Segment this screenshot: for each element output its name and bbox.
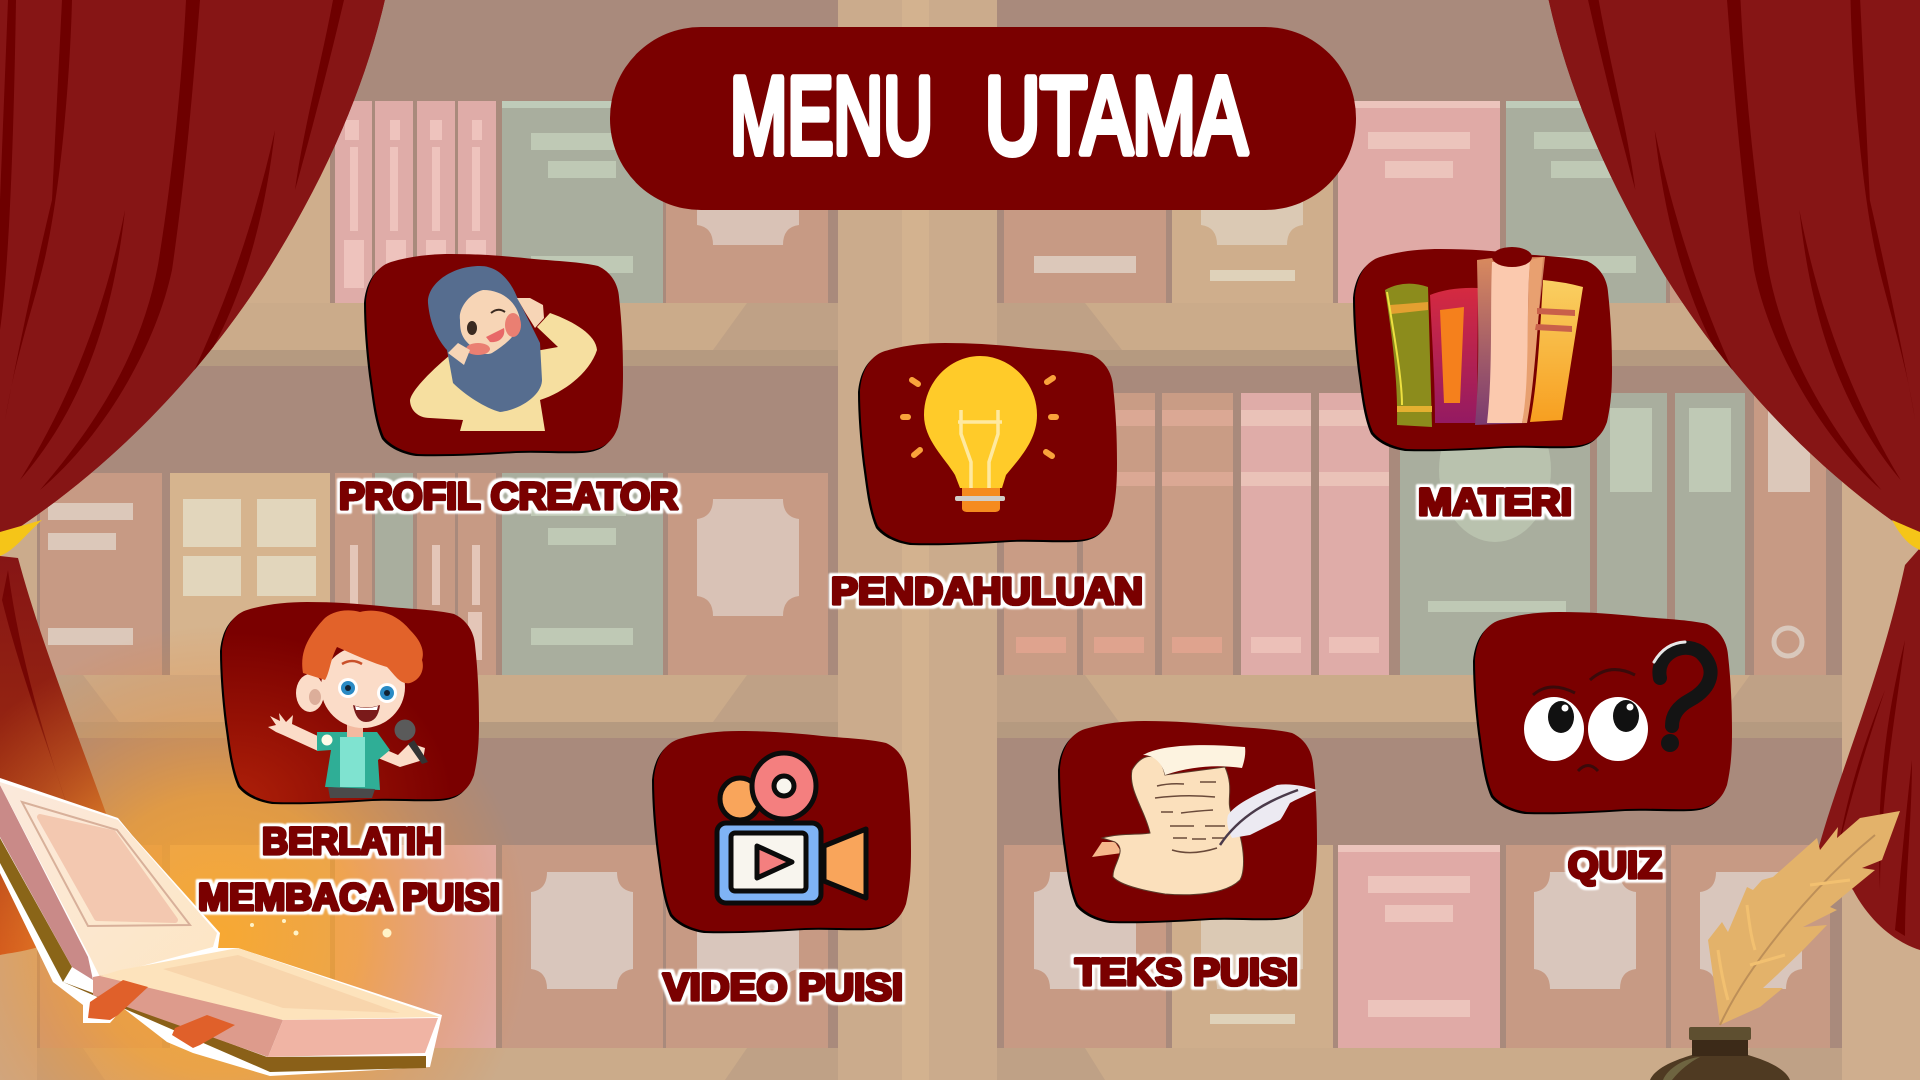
card: teks puisi [1058,721,1317,923]
lower right curtain [1818,548,1920,950]
title banner [610,27,1356,210]
ink bottle [1650,1027,1790,1080]
title banner: UTAMA [985,55,1247,177]
shelf boards [37,303,1842,1080]
open book [0,778,442,1076]
title banner: MENU [730,55,933,177]
label: video puisi: VIDEO PUISI [663,967,903,1009]
right curtain [1548,0,1920,540]
label: pendahuluan: PENDAHULUAN [831,571,1143,613]
card: berlatih membaca puisi [220,602,479,804]
glow behind open book [0,620,560,1080]
card: materi [1353,247,1612,451]
label: berlatih membaca puisi: MEMBACA PUISI [198,877,500,919]
card: quiz [1473,612,1732,814]
icon: stack of books [1385,247,1583,427]
card: pendahuluan [858,343,1117,545]
books row 3 [40,845,1830,1048]
label: materi: MATERI [1418,482,1572,524]
sparkles [250,919,392,938]
label: profil creator: PROFIL CREATOR [339,476,678,518]
icon: girl in hijab [410,266,597,431]
quill feather [1708,811,1900,1025]
icon: singing boy [268,610,428,798]
books row 1 [190,101,1740,303]
curtain tie left [0,520,42,556]
icon: thinking eyes with question mark [1524,642,1711,771]
card: video puisi [652,731,911,933]
books row 2 [40,393,1826,675]
label: berlatih membaca puisi: BERLATIH [262,821,442,863]
label: quiz: QUIZ [1568,845,1662,887]
icon: video camera [717,753,866,903]
left curtain [0,0,385,540]
label: teks puisi: TEKS PUISI [1075,952,1298,994]
curtain tie right [1892,520,1920,550]
icon: light bulb [903,356,1056,512]
label: berlatih membaca puisi [198,821,500,919]
lower left curtain [0,556,112,955]
card: profil creator [364,254,623,456]
icon: scroll and quill [1092,745,1317,895]
